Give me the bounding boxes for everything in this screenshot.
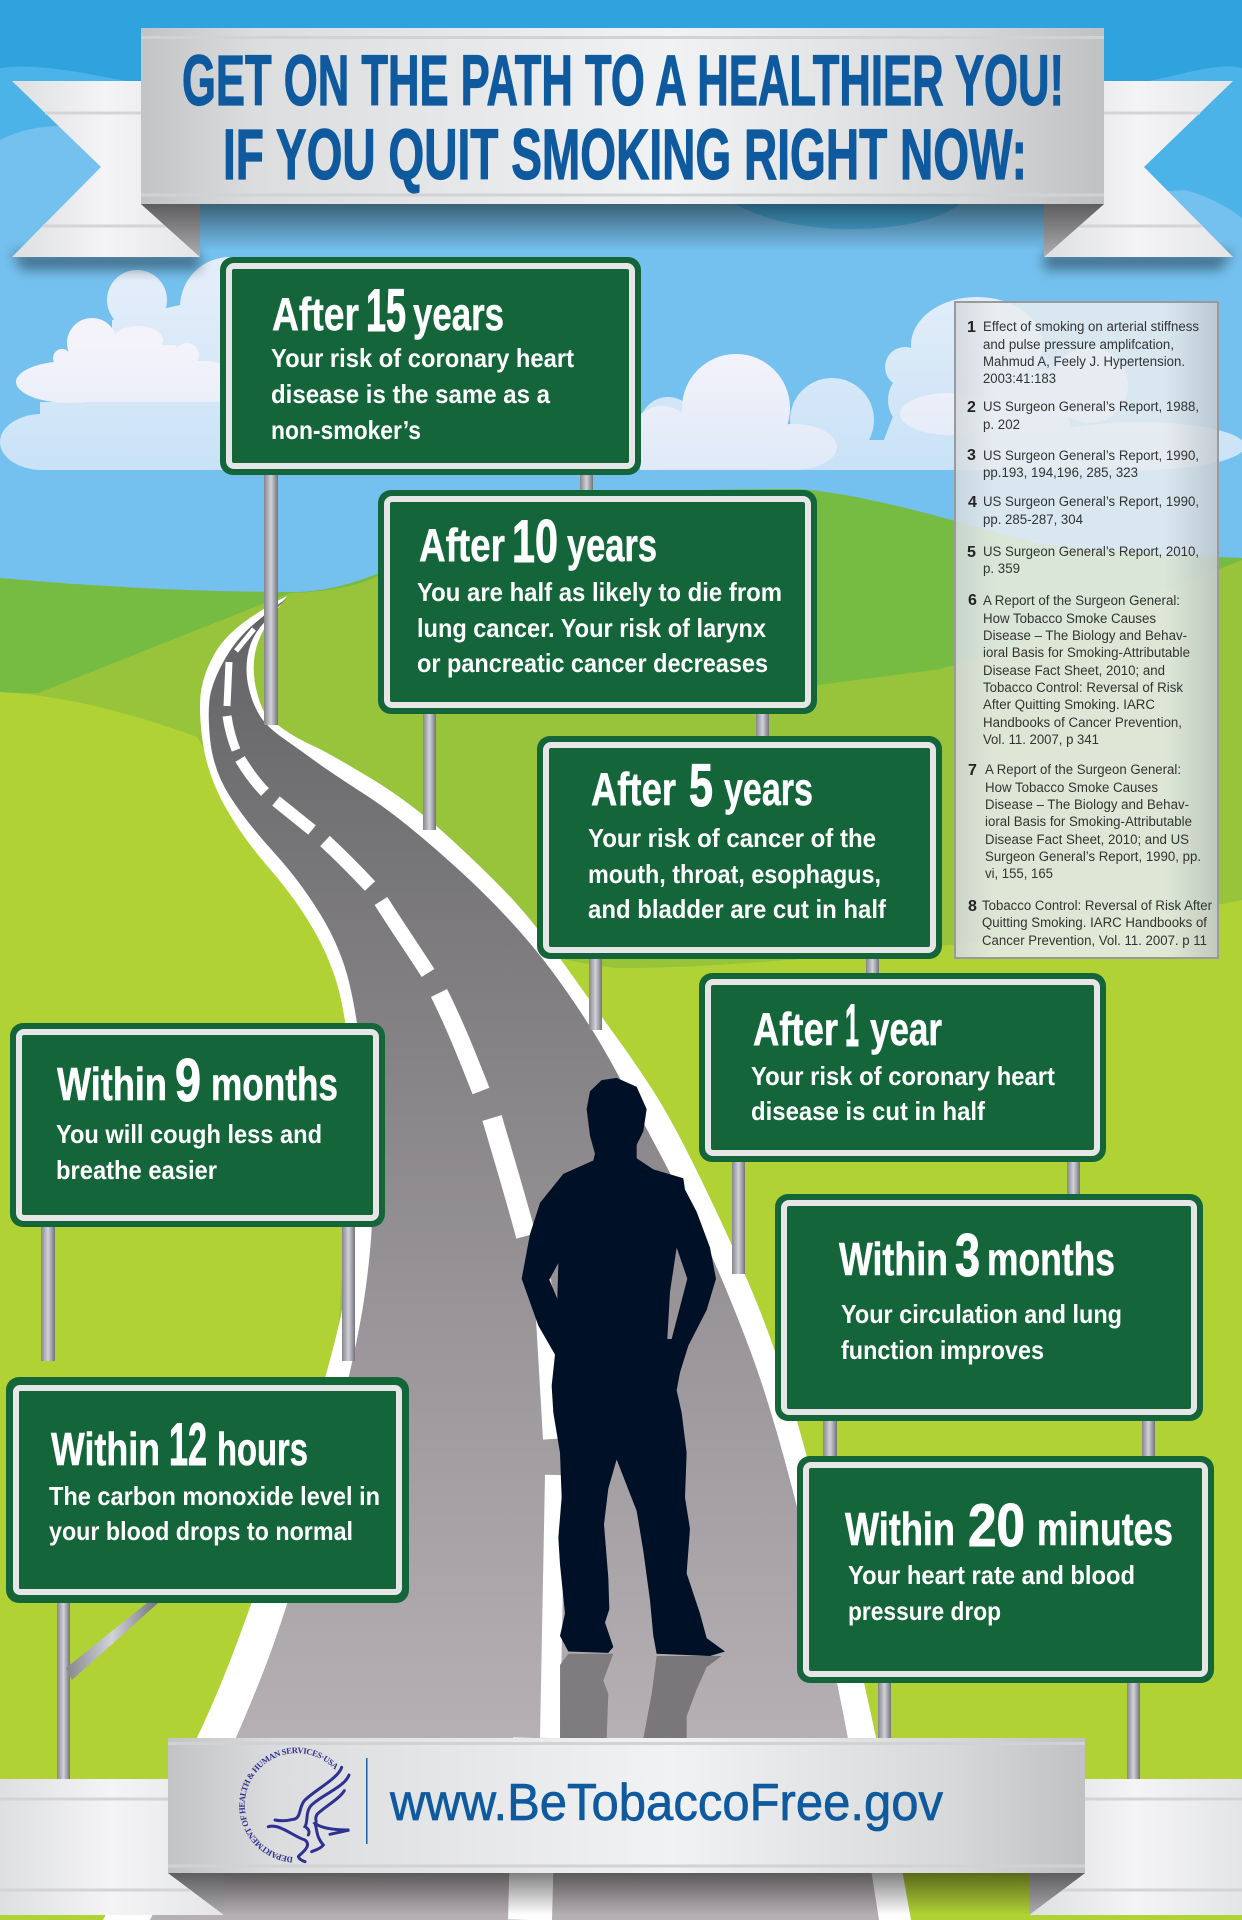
panel: references: Disease Fact Sheet, 2010; and [983, 663, 1165, 678]
man silhouette [522, 1078, 725, 1656]
panel: references: ioral Basis for Smoking-Attributable [985, 814, 1192, 829]
sign: after 5 years: mouth, throat, esophagus, [588, 859, 881, 889]
sign: after 5 years: and bladder are cut in half [588, 894, 886, 924]
sign: after 10 years: or pancreatic cancer decreases [417, 648, 768, 678]
road centre dashes [227, 629, 555, 1920]
panel: references: 3 [967, 447, 976, 464]
bottom ribbon [0, 1738, 1242, 1915]
panel: references: Handbooks of Cancer Prevention, [983, 715, 1182, 730]
panel: references: Surgeon General’s Report, 1990, pp. [985, 849, 1201, 864]
panel: references: Effect of smoking on arterial stiffness [983, 319, 1199, 334]
sign: within 20 minutes: minutes [1037, 1503, 1173, 1555]
panel: references: 5 [967, 544, 976, 561]
panel: references: Disease – The Biology and Behav- [983, 628, 1187, 643]
sign: after 10 years: years [567, 519, 657, 571]
sign: after 15 years [220, 257, 641, 475]
panel: references: 4 [968, 494, 977, 511]
sign: within 9 months: 9 [175, 1047, 201, 1114]
sign: within 3 months: 3 [955, 1222, 980, 1289]
panel: references: Tobacco Control: Reversal of Risk [983, 680, 1183, 695]
panel: references: US Surgeon General’s Report, 2010, [983, 544, 1199, 559]
sign: after 1 year: Your risk of coronary heart [751, 1061, 1055, 1091]
sign: after 15 years: After [272, 288, 359, 340]
sign: after 10 years: 10 [512, 508, 558, 575]
clouds [0, 257, 1242, 470]
sign: after 15 years: non-smoker’s [271, 415, 421, 445]
panel: references: and pulse pressure amplifcation, [983, 337, 1174, 352]
sign: within 3 months: Your circulation and lung [841, 1299, 1122, 1329]
panel: references: How Tobacco Smoke Causes [985, 780, 1158, 795]
panel: references: p. 359 [983, 561, 1020, 576]
sign: within 9 months [10, 1023, 385, 1227]
panel: references: ioral Basis for Smoking-Attributable [983, 645, 1190, 660]
sign: within 9 months: breathe easier [56, 1155, 217, 1185]
front clouds [16, 318, 1000, 470]
sign: after 1 year [699, 973, 1106, 1162]
panel: references: US Surgeon General’s Report, 1990, [983, 494, 1199, 509]
panel: references: How Tobacco Smoke Causes [983, 611, 1156, 626]
sign: after 1 year: After [753, 1003, 838, 1055]
panel: references: Vol. 11. 2007, p 341 [983, 732, 1099, 747]
panel: references: Tobacco Control: Reversal of Risk After [982, 898, 1212, 913]
sign: after 5 years: years [724, 763, 813, 815]
sign: after 1 year: disease is cut in half [751, 1096, 985, 1126]
panel: references: A Report of the Surgeon General: [985, 762, 1181, 777]
panel: references: Quitting Smoking. IARC Handbooks of [982, 915, 1207, 930]
panel: references: Disease – The Biology and Behav- [985, 797, 1189, 812]
panel: references: A Report of the Surgeon General: [983, 593, 1180, 608]
panel: references: p. 202 [983, 417, 1020, 432]
panel: references: Mahmud A, Feely J. Hypertension. [983, 354, 1185, 369]
road white edges [103, 596, 911, 1920]
panel: references: 2 [967, 399, 976, 416]
man reflection [560, 1654, 722, 1739]
title [182, 42, 1064, 195]
icon: HHS seal: DEPARTMENT OF HEALTH & HUMAN SERVICES·USA [239, 1748, 338, 1863]
sign: within 20 minutes: Within [845, 1503, 955, 1555]
panel: references: 1 [967, 319, 976, 336]
panel: references: 2003:41:183 [983, 371, 1056, 386]
sign: after 15 years: 15 [366, 277, 406, 344]
sign: after 10 years: lung cancer. Your risk of larynx [417, 613, 766, 643]
panel: references: After Quitting Smoking. IARC [983, 697, 1155, 712]
panel: references: Disease Fact Sheet, 2010; and US [985, 832, 1189, 847]
sign: within 3 months [775, 1194, 1203, 1421]
road [103, 596, 911, 1920]
sign: after 5 years: Your risk of cancer of the [588, 823, 876, 853]
sign: after 15 years: disease is the same as a [271, 379, 550, 409]
sign: within 12 hours [6, 1377, 409, 1603]
panel: references [955, 302, 1218, 958]
panel: references: vi, 155, 165 [985, 866, 1053, 881]
sign: within 3 months: Within [839, 1233, 948, 1285]
sign: after 5 years: After [591, 763, 676, 815]
sign: after 15 years: years [413, 288, 504, 340]
divider [366, 1758, 368, 1844]
panel: references: 6 [968, 592, 977, 609]
panel: references: 8 [968, 898, 977, 915]
sign: within 3 months: function improves [841, 1335, 1044, 1365]
sign: within 20 minutes: pressure drop [848, 1596, 1001, 1626]
sign: within 12 hours: your blood drops to normal [49, 1516, 353, 1546]
url: www.BeTobaccoFree.gov [389, 1774, 943, 1832]
panel: references: 7 [968, 762, 977, 779]
sign: after 10 years [378, 490, 817, 714]
sign: after 5 years: 5 [689, 752, 713, 819]
sign: after 10 years: You are half as likely to die from [417, 577, 782, 607]
panel: references: Cancer Prevention, Vol. 11. 2007. p 11 [982, 933, 1207, 948]
sign: after 10 years: After [419, 519, 505, 571]
sign: after 1 year: year [870, 1003, 942, 1055]
sign: within 20 minutes [797, 1456, 1214, 1683]
sign: within 20 minutes: 20 [968, 1492, 1025, 1559]
sign: after 15 years: Your risk of coronary heart [271, 343, 574, 373]
hills [0, 489, 1242, 1920]
sign: within 12 hours: hours [217, 1423, 308, 1475]
sign: within 12 hours: 12 [169, 1411, 207, 1478]
sign: within 20 minutes: Your heart rate and blood [848, 1560, 1135, 1590]
back clouds [0, 257, 1242, 470]
sign: within 9 months: Within [57, 1058, 167, 1110]
road surface [150, 598, 879, 1920]
panel: references: pp. 285-287, 304 [983, 512, 1083, 527]
panel: references: pp.193, 194,196, 285, 323 [983, 465, 1138, 480]
sign poles [41, 475, 1155, 1783]
panel: references: US Surgeon General’s Report, 1988, [983, 399, 1199, 414]
sign: within 12 hours: The carbon monoxide level in [49, 1481, 380, 1511]
sign: within 3 months: months [987, 1233, 1115, 1285]
sign: within 12 hours: Within [51, 1423, 160, 1475]
panel: references: US Surgeon General’s Report, 1990, [983, 448, 1199, 463]
sign: after 1 year: 1 [845, 992, 859, 1059]
top ribbon [12, 28, 1233, 270]
sign: within 9 months: months [211, 1058, 338, 1110]
sign: within 9 months: You will cough less and [56, 1119, 322, 1149]
sign: after 5 years [537, 736, 942, 959]
sky background [0, 0, 1242, 640]
